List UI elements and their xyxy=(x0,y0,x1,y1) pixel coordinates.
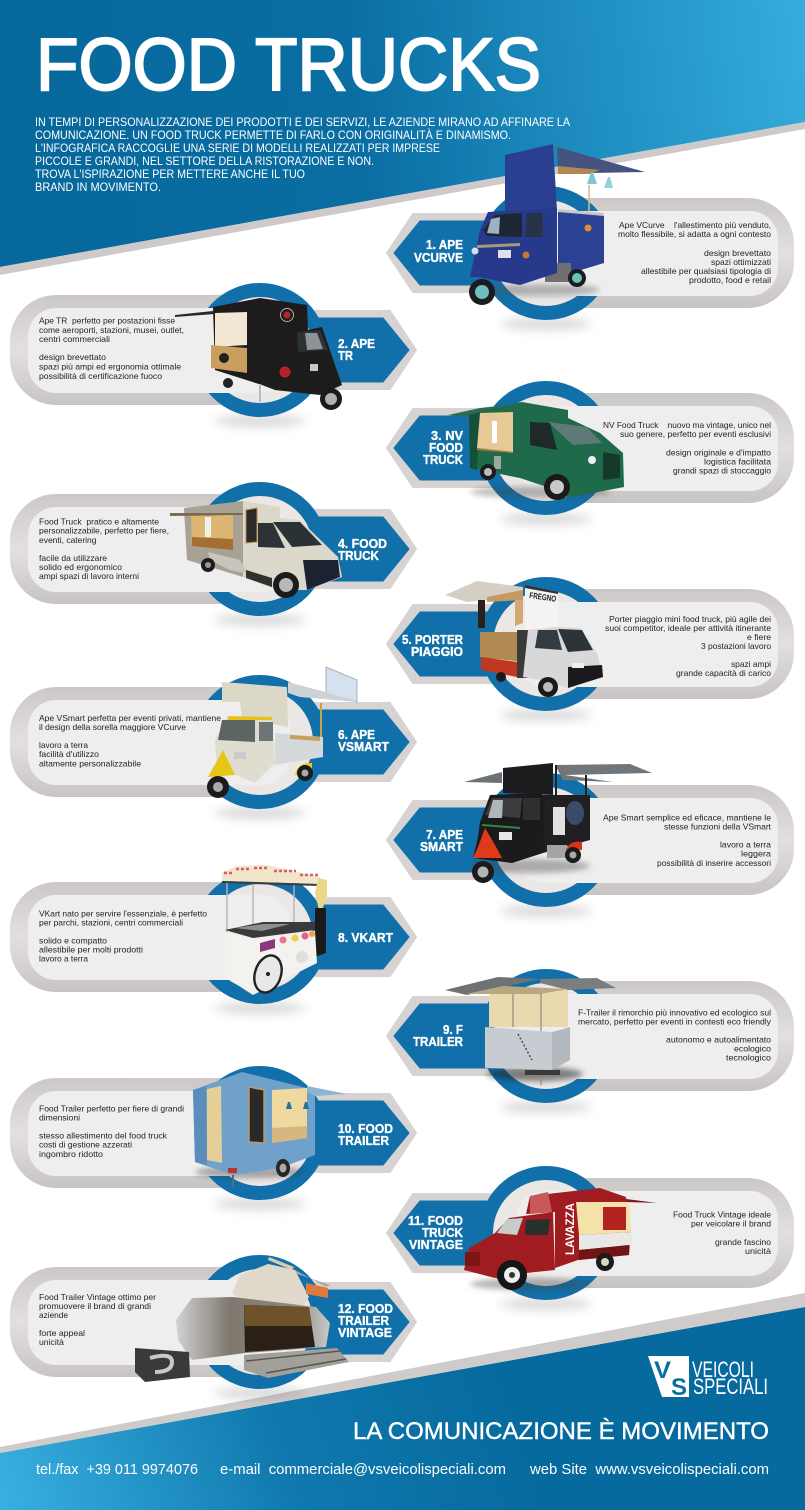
description: design originale e d'impatto xyxy=(666,448,771,458)
description: Food Trailer perfetto per fiere di grandi xyxy=(39,1104,184,1114)
description: aziende xyxy=(39,1310,68,1320)
panel: 6 Ape VSmart xyxy=(10,667,416,819)
vehicle: red Lavazza truck xyxy=(464,1188,657,1290)
intro text: COMUNICAZIONE. UN FOOD TRUCK PERMETTE DI FARLO CON ORIGINALITÀ E DINAMISMO. xyxy=(35,127,511,142)
description: grande fascino xyxy=(715,1237,771,1247)
label: 7. Ape Smart xyxy=(420,827,463,854)
description: e fiere xyxy=(747,632,771,642)
description xyxy=(603,812,772,868)
description: Ape VCurve l'allestimento più venduto, xyxy=(619,220,771,230)
description xyxy=(39,1292,156,1347)
description: VKart nato per servire l'essenziale, è perfetto xyxy=(39,908,207,918)
description: possibilità di certificazione fuoco xyxy=(39,371,162,381)
description: costi di gestione azzerati xyxy=(39,1140,132,1150)
description: forte appeal xyxy=(39,1328,85,1338)
contact details: e-mail commerciale@vsveicolispeciali.com xyxy=(220,1461,506,1478)
intro text: IN TEMPI DI PERSONALIZZAZIONE DEI PRODOTTI E DEI SERVIZI, LE AZIENDE MIRANO AD AFFINARE LA xyxy=(35,115,571,129)
panel: 7 Ape Smart xyxy=(387,763,794,917)
description xyxy=(39,1104,184,1159)
vehicle: blue trailer xyxy=(193,1072,347,1187)
vehicle: green NV truck xyxy=(448,402,624,500)
vehicle: cream Ape VSmart xyxy=(207,667,357,798)
vehicle: blue Ape VCurve xyxy=(469,144,645,305)
label: 11. Food Truck Vintage: VINTAGE xyxy=(409,1237,463,1252)
label: 7. Ape Smart: 7. APE xyxy=(426,827,463,842)
label: 12. Food Trailer Vintage: VINTAGE xyxy=(338,1325,392,1340)
vehicle: F-Trailer xyxy=(445,977,616,1085)
description: Food Truck Vintage ideale xyxy=(673,1210,771,1220)
description: autonomo e autoalimentato xyxy=(666,1034,771,1044)
description: Porter piaggio mini food truck, più agile dei xyxy=(609,614,771,624)
description: Food Trailer Vintage ottimo per xyxy=(39,1292,156,1302)
description: prodotto, food e retail xyxy=(689,275,771,285)
description: lavoro a terra xyxy=(39,954,88,964)
logo xyxy=(648,1356,768,1401)
description: per veicolare il brand xyxy=(691,1218,771,1228)
description: 3 postazioni lavoro xyxy=(701,641,771,651)
label: 1. Ape VCurve xyxy=(414,237,463,265)
label: 2. Ape TR xyxy=(338,336,375,363)
description: eventi, catering xyxy=(39,535,97,545)
bottom banner xyxy=(0,1293,805,1510)
description: centri commerciali xyxy=(39,334,110,344)
description: F-Trailer il rimorchio più innovativo ed ecologico sul xyxy=(578,1008,771,1018)
label: 4. Food Truck: TRUCK xyxy=(338,548,380,563)
label: 10. Food Trailer xyxy=(338,1121,393,1148)
label: 6. Ape VSmart: VSMART xyxy=(338,739,389,754)
logo: SPECIALI xyxy=(693,1374,768,1399)
description xyxy=(605,614,771,678)
vehicle: ice cream cart xyxy=(222,865,327,996)
description: leggera xyxy=(741,848,771,858)
intro text: PICCOLE E GRANDI, NEL SETTORE DELLA RISTORAZIONE E NON. xyxy=(35,154,374,168)
description: promuovere il brand di grandi xyxy=(39,1301,151,1311)
description: molto flessibile, si adatta a ogni contesto xyxy=(618,229,771,239)
description: ampi spazi di lavoro interni xyxy=(39,571,139,581)
description: dimensioni xyxy=(39,1112,80,1122)
label: 11. Food Truck Vintage: 11. FOOD xyxy=(408,1213,463,1228)
label: 3. NV Food Truck xyxy=(423,428,464,467)
description: ecologico xyxy=(734,1044,771,1054)
label: 12. Food Trailer Vintage: 12. FOOD xyxy=(338,1301,393,1316)
description: grandi spazi di stoccaggio xyxy=(673,466,771,476)
description: design brevettato xyxy=(39,352,106,362)
label: 10. Food Trailer: TRAILER xyxy=(338,1133,390,1148)
description: stesso allestimento del food truck xyxy=(39,1130,168,1140)
description: logistica facilitata xyxy=(704,456,771,466)
description: facile da utilizzare xyxy=(39,553,107,563)
top banner xyxy=(0,0,805,275)
label: 1. Ape VCurve: VCURVE xyxy=(414,250,463,265)
label: 3. NV Food Truck: FOOD xyxy=(429,440,463,455)
description: per parchi, stazioni, centri commerciali xyxy=(39,918,183,928)
description: come aeroporti, stazioni, musei, outlet, xyxy=(39,325,184,335)
description: unicità xyxy=(745,1246,771,1256)
label: 9. F Trailer xyxy=(413,1022,464,1049)
description xyxy=(39,908,207,964)
panel: 4 Food Truck xyxy=(10,489,416,626)
label: 11. Food Truck Vintage: TRUCK xyxy=(422,1225,464,1240)
description: Ape Smart semplice ed eficace, mantiene le xyxy=(603,812,771,822)
panel: 3 NV Food Truck xyxy=(387,388,794,525)
description: solido ed ergonomico xyxy=(39,562,122,572)
contact details xyxy=(36,1461,769,1478)
description: spazi più ampi ed ergonomia ottimale xyxy=(39,362,181,372)
panel: 9 F Trailer xyxy=(387,976,794,1113)
description: ingombro ridotto xyxy=(39,1149,103,1159)
description: altamente personalizzabile xyxy=(39,758,141,768)
intro text: BRAND IN MOVIMENTO. xyxy=(35,180,161,194)
description: Food Truck pratico e altamente xyxy=(39,516,159,526)
description: stesse funzioni della VSmart xyxy=(664,822,772,832)
description: lavoro a terra xyxy=(39,740,88,750)
vehicle: white and grey food truck xyxy=(170,501,342,598)
description: solido e compatto xyxy=(39,936,107,946)
panel: 8 VKart xyxy=(10,865,416,1014)
description: Ape TR perfetto per postazioni fisse xyxy=(39,316,175,326)
slogan: LA COMUNICAZIONE È MOVIMENTO xyxy=(353,1418,769,1445)
panel: 5 Porter Piaggio xyxy=(387,581,794,721)
description xyxy=(39,316,184,381)
description: unicità xyxy=(39,1337,64,1347)
panel: 10 Food Trailer xyxy=(10,1072,416,1210)
label: 7. Ape Smart: SMART xyxy=(420,839,463,854)
description: spazi ottimizzati xyxy=(711,257,771,267)
description xyxy=(39,516,169,581)
panel: 2 Ape TR xyxy=(10,290,416,427)
label: 9. F Trailer: 9. F xyxy=(443,1022,463,1037)
label: 11. Food Truck Vintage xyxy=(408,1213,464,1252)
label: 8. VKart: 8. VKART xyxy=(338,930,393,945)
contact details: tel./fax +39 011 9974076 xyxy=(36,1461,198,1478)
description: suoi competitor, ideale per attività itinerante xyxy=(605,623,771,633)
intro text xyxy=(35,115,571,194)
vehicle: black Ape TR xyxy=(175,298,342,410)
label: 2. Ape TR: 2. APE xyxy=(338,336,375,351)
label: 6. Ape VSmart xyxy=(338,727,389,754)
description: personalizzabile, perfetto per fiere, xyxy=(39,526,169,536)
title: FOOD TRUCKS xyxy=(36,23,541,106)
description: suo genere, perfetto per eventi esclusivi xyxy=(620,429,771,439)
logo: V xyxy=(654,1357,671,1384)
label: 5. Porter Piaggio: PIAGGIO xyxy=(411,644,463,659)
description: lavoro a terra xyxy=(720,840,771,850)
intro text: L'INFOGRAFICA RACCOGLIE UNA SERIE DI MODELLI REALIZZATI PER IMPRESE xyxy=(35,141,440,155)
label: 2. Ape TR: TR xyxy=(338,348,354,363)
vehicle: black and red Ape Smart xyxy=(464,763,652,883)
label: 4. Food Truck: 4. FOOD xyxy=(338,536,387,551)
label: 12. Food Trailer Vintage xyxy=(338,1301,393,1340)
panel: 11 Food Truck Vintage xyxy=(387,1173,794,1310)
contact details: web Site www.vsveicolispeciali.com xyxy=(529,1461,769,1478)
label: 10. Food Trailer: 10. FOOD xyxy=(338,1121,393,1136)
description: facilità d'utilizzo xyxy=(39,749,99,759)
description: spazi ampi xyxy=(731,659,771,669)
description: allestibile per molti prodotti xyxy=(39,944,143,954)
description: tecnologico xyxy=(726,1052,771,1062)
description: NV Food Truck nuovo ma vintage, unico nel xyxy=(603,420,771,430)
logo: S xyxy=(671,1374,687,1401)
description: il design della sorella maggiore VCurve xyxy=(39,722,186,732)
logo: VEICOLI xyxy=(692,1357,754,1382)
intro text: TROVA L'ISPIRAZIONE PER METTERE ANCHE IL TUO xyxy=(35,167,305,181)
description: Ape VSmart perfetta per eventi privati, mantiene xyxy=(39,713,221,723)
label: 1. Ape VCurve: 1. APE xyxy=(426,237,463,252)
description xyxy=(603,420,771,476)
vehicle: white Piaggio Porter: FREGNO xyxy=(529,590,557,604)
description: mercato, perfetto per eventi in contesti eco friendly xyxy=(578,1016,772,1026)
label: 3. NV Food Truck: 3. NV xyxy=(431,428,463,443)
label: 3. NV Food Truck: TRUCK xyxy=(423,452,464,467)
description xyxy=(618,220,771,285)
vehicle: red Lavazza truck: LAVAZZA xyxy=(563,1203,577,1255)
label: 6. Ape VSmart: 6. APE xyxy=(338,727,375,742)
description: grande capacità di carico xyxy=(676,668,771,678)
description: allestibile per qualsiasi tipologia di xyxy=(641,266,771,276)
description xyxy=(578,1008,772,1062)
label: 12. Food Trailer Vintage: TRAILER xyxy=(338,1313,390,1328)
label: 9. F Trailer: TRAILER xyxy=(413,1034,464,1049)
panel: 12 Food Trailer Vintage xyxy=(10,1257,416,1399)
description: possibilità di inserire accessori xyxy=(657,858,771,868)
label: 5. Porter Piaggio xyxy=(402,632,464,659)
vehicle: airstream trailer xyxy=(135,1257,349,1382)
description: design brevettato xyxy=(704,248,771,258)
label: 4. Food Truck xyxy=(338,536,387,563)
panel: 1 Ape VCurve xyxy=(387,144,794,330)
description xyxy=(39,713,221,768)
description xyxy=(673,1210,771,1256)
label: 5. Porter Piaggio: 5. PORTER xyxy=(402,632,464,647)
vehicle: white Piaggio Porter xyxy=(445,581,603,697)
